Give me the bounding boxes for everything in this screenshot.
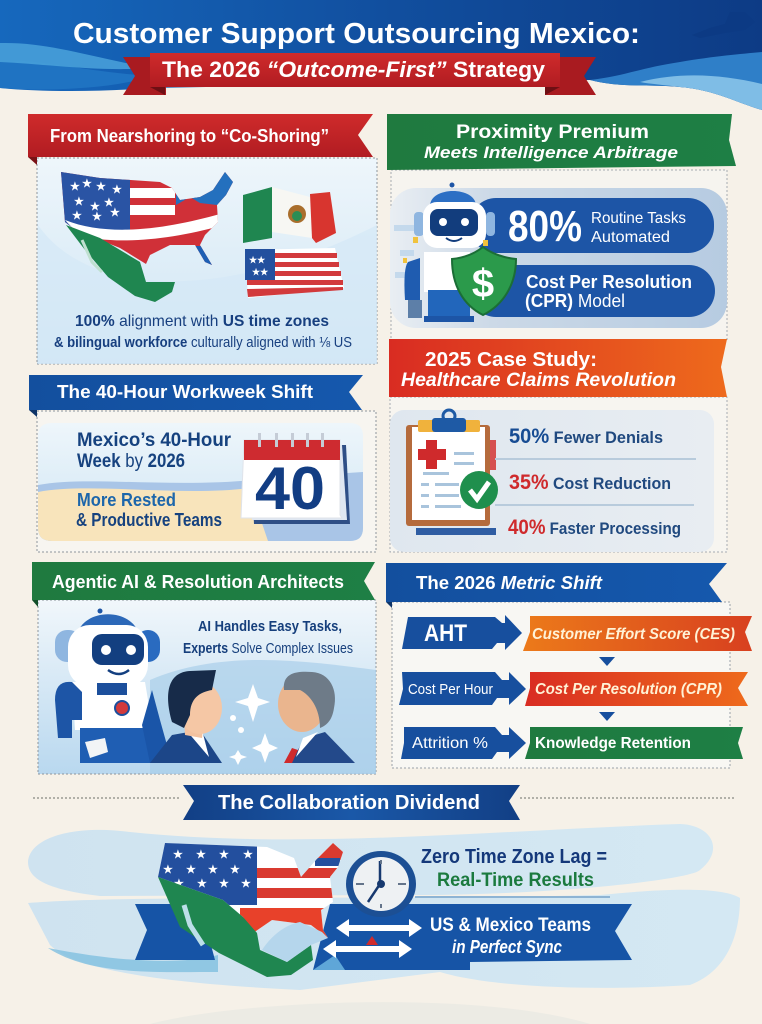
metric row: cost per hour to CPR xyxy=(399,672,748,706)
metric row: attrition to knowledge retention: Knowledge Retention xyxy=(535,735,691,752)
map: US and Mexico: ★ xyxy=(174,878,184,890)
divider and heading: collaboration dividend: The Collaboration Dividend xyxy=(218,792,480,814)
panel body xyxy=(392,602,730,768)
icon: two-way arrows xyxy=(323,919,422,958)
panel body xyxy=(391,170,727,340)
decorative footer swell xyxy=(150,1002,590,1024)
subtitle ribbon: The 2026 “Outcome-First” Strategy xyxy=(162,57,546,82)
map: US and Mexico xyxy=(55,170,240,302)
panel body xyxy=(37,411,376,552)
panel: proximity premium xyxy=(387,114,736,340)
map: US and Mexico: ★ xyxy=(230,864,240,876)
text: 40-hour week xyxy=(77,430,232,472)
map: US and Mexico: ★ xyxy=(241,878,251,890)
icon: robot xyxy=(394,182,495,322)
map: US and Mexico: ★ xyxy=(74,196,84,208)
metric row: AHT to CES xyxy=(402,615,752,651)
flag: Mexico xyxy=(243,187,336,243)
icon: calendar: 40 xyxy=(255,455,325,522)
text: rested teams xyxy=(76,490,222,530)
text: 40-hour week: Week by 2026 xyxy=(77,451,185,472)
map: US and Mexico: ★ xyxy=(219,878,229,890)
text: 40-hour week: Mexico’s 40-Hour xyxy=(77,430,232,451)
map: US and Mexico: ★ xyxy=(173,849,183,861)
person: right expert xyxy=(278,672,355,763)
text: teams in sync: US & Mexico Teams xyxy=(430,915,591,936)
heading ribbon: 2025 Case Study: xyxy=(425,349,597,371)
map: US and Mexico: ★ xyxy=(96,181,106,193)
map: US and Mexico: ★ xyxy=(163,864,173,876)
map: US and Mexico: ★ xyxy=(90,201,100,213)
panel: 40-hour workweek shift xyxy=(29,375,376,552)
background blobs xyxy=(28,824,740,990)
map: US and Mexico: ★ xyxy=(243,849,253,861)
text: rested teams: & Productive Teams xyxy=(76,510,222,530)
heading ribbon xyxy=(389,339,727,397)
map: US and Mexico: ★ xyxy=(219,849,229,861)
backing panel xyxy=(390,188,727,328)
panel: agentic AI xyxy=(32,562,376,774)
heading ribbon xyxy=(32,562,375,607)
heading ribbon: The 2026 Metric Shift xyxy=(416,573,603,593)
blue ribbon xyxy=(135,904,632,970)
icon: shield with dollar: $ xyxy=(472,262,494,306)
stat: fewer denials: 50% Fewer Denials xyxy=(509,425,663,448)
metric row: AHT to CES: AHT xyxy=(424,620,467,647)
map: US and Mexico: ★ xyxy=(112,184,122,196)
map: US and Mexico: ★ xyxy=(104,197,114,209)
text: alignment xyxy=(54,313,352,351)
stat pill: 80%: 80% xyxy=(508,202,582,251)
Mexico xyxy=(66,225,175,302)
heading ribbon: The 40-Hour Workweek Shift xyxy=(57,382,313,402)
map: US and Mexico: ★ xyxy=(70,181,80,193)
heading ribbon xyxy=(28,114,373,165)
panel: collaboration dividend xyxy=(28,824,740,990)
sparkles xyxy=(229,684,278,765)
text: AI handles xyxy=(183,618,353,657)
person: left expert xyxy=(150,670,222,763)
heading ribbon: Healthcare Claims Revolution xyxy=(401,370,676,391)
header banner xyxy=(0,0,762,110)
flag: United States xyxy=(245,248,344,298)
text: alignment: 100% alignment with US time zones xyxy=(75,313,329,330)
map: US and Mexico xyxy=(150,840,350,977)
text: alignment: & bilingual workforce culturally aligned with ⅛ US xyxy=(54,334,352,351)
stat pill: 80% xyxy=(470,198,714,253)
arrow down xyxy=(599,657,615,666)
text: zero time zone lag: Real-Time Results xyxy=(437,870,594,891)
metric row: cost per hour to CPR: Cost Per Hour xyxy=(408,681,493,698)
map: US and Mexico: ★ xyxy=(92,211,102,223)
stat pill: CPR: Cost Per Resolution xyxy=(526,272,692,292)
text: zero time zone lag xyxy=(415,846,610,898)
flag: United States: ★★ xyxy=(249,255,266,265)
panel body xyxy=(38,600,376,774)
metric row: attrition to knowledge retention: Attrition % xyxy=(412,735,488,752)
panel body xyxy=(37,158,377,364)
text: zero time zone lag: Zero Time Zone Lag = xyxy=(421,846,607,868)
heading ribbon: Proximity Premium xyxy=(456,122,649,143)
inner panel xyxy=(390,410,714,552)
stat: faster processing: 40% Faster Processing xyxy=(508,516,681,539)
text: rested teams: More Rested xyxy=(77,490,176,510)
text: teams in sync xyxy=(430,915,591,957)
icon: calendar xyxy=(241,433,350,524)
icon: clipboard xyxy=(406,410,498,535)
icon: shield with dollar xyxy=(452,247,516,315)
stat pill: CPR xyxy=(470,265,715,317)
map: US and Mexico: ★ xyxy=(186,864,196,876)
subtitle ribbon xyxy=(123,53,596,95)
stat: cost reduction: 35% Cost Reduction xyxy=(509,471,671,494)
icon: robot xyxy=(55,608,172,763)
stat pill: 80%: Routine Tasks xyxy=(591,210,686,227)
inner panel xyxy=(38,423,363,541)
map: US and Mexico: ★ xyxy=(110,207,120,219)
divider and heading: collaboration dividend xyxy=(33,785,735,820)
heading ribbon: From Nearshoring to “Co-Shoring” xyxy=(50,126,329,146)
map: US and Mexico: ★ xyxy=(82,178,92,190)
map: US and Mexico: ★ xyxy=(208,864,218,876)
Mexico xyxy=(158,877,313,977)
text: AI handles: Experts Solve Complex Issues xyxy=(183,640,353,657)
panel: from nearshoring to co-shoring xyxy=(28,114,377,364)
panel: 2026 metric shift xyxy=(386,563,752,768)
flag: United States: ★★ xyxy=(252,267,269,277)
panel: case study xyxy=(389,339,727,552)
metric row: cost per hour to CPR: Cost Per Resolution (CPR) xyxy=(535,681,722,698)
heading ribbon: Meets Intelligence Arbitrage xyxy=(424,143,678,162)
metric row: attrition to knowledge retention xyxy=(401,727,743,759)
title: Customer Support Outsourcing Mexico: xyxy=(73,18,640,50)
map: US and Mexico: ★ xyxy=(196,849,206,861)
map: US and Mexico: ★ xyxy=(72,210,82,222)
heading ribbon xyxy=(29,375,363,417)
stat pill: 80%: Automated xyxy=(591,229,670,246)
icon: clock xyxy=(346,851,416,917)
heading ribbon xyxy=(387,114,736,170)
metric row: AHT to CES: Customer Effort Score (CES) xyxy=(532,626,735,643)
stat pill: CPR: (CPR) Model xyxy=(525,291,625,311)
arrow down xyxy=(599,712,615,721)
heading ribbon xyxy=(386,563,727,608)
map: US and Mexico: ★ xyxy=(197,878,207,890)
heading ribbon: Agentic AI & Resolution Architects xyxy=(52,572,344,592)
panel body xyxy=(390,397,727,552)
text: teams in sync: in Perfect Sync xyxy=(452,937,562,957)
text: AI handles: AI Handles Easy Tasks, xyxy=(198,618,342,635)
